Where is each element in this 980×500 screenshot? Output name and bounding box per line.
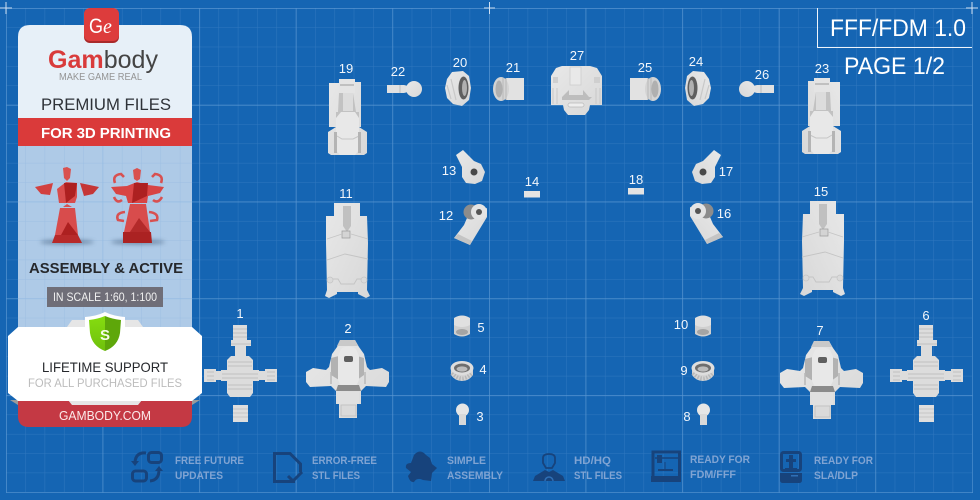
feature: error-free: ERROR-FREE <box>312 455 377 467</box>
scale tag <box>47 287 163 307</box>
part 17 <box>692 150 733 184</box>
tagline: MAKE GAME REAL <box>59 71 142 83</box>
part 3 <box>456 404 484 425</box>
panel top <box>18 25 192 118</box>
brand name: Gambody <box>48 46 158 74</box>
part 3: 3 <box>476 409 484 424</box>
feature: simple assembly: ASSEMBLY <box>447 470 504 482</box>
part 11: 11 <box>339 186 353 201</box>
part 8 <box>683 404 710 425</box>
support heading: LIFETIME SUPPORT <box>42 359 168 375</box>
part 21: 21 <box>506 60 520 75</box>
feature: simple assembly: SIMPLE <box>447 455 486 467</box>
part 10 <box>674 316 711 336</box>
feature: SLA: SLA/DLP <box>814 470 858 482</box>
part 24 <box>685 54 711 106</box>
feature: SLA <box>780 452 873 483</box>
part 7: 7 <box>816 323 824 338</box>
part 10: 10 <box>674 317 688 332</box>
red banner <box>18 118 192 146</box>
icon: update arrows <box>131 452 163 481</box>
part 22: 22 <box>391 64 405 79</box>
part 18: 18 <box>629 172 643 187</box>
part 23: 23 <box>815 61 829 76</box>
icon: green shield: S <box>100 327 110 344</box>
part 14 <box>524 174 540 198</box>
footer features <box>131 452 873 483</box>
panel: promo sidebar <box>8 8 202 427</box>
part 2 <box>306 321 389 418</box>
feature: free updates <box>131 452 244 482</box>
icon: SLA printer <box>780 452 802 483</box>
feature: HD/HQ <box>533 454 622 482</box>
red banner: FOR 3D PRINTING <box>41 125 171 142</box>
assembly heading: ASSEMBLY & ACTIVE <box>29 261 183 277</box>
part 19: 19 <box>339 61 353 76</box>
part 20 <box>445 55 471 106</box>
support ribbon <box>8 312 202 405</box>
part 22 <box>387 64 422 97</box>
part 5: 5 <box>477 320 485 335</box>
feature: SLA: READY FOR <box>814 455 873 467</box>
icon: green shield <box>85 312 125 353</box>
version heading <box>818 8 972 48</box>
part 12: 12 <box>439 208 453 223</box>
part 27 <box>551 48 602 115</box>
premium heading: PREMIUM FILES <box>41 95 171 114</box>
icon: FDM printer <box>651 452 681 482</box>
part 13 <box>442 150 485 184</box>
part 9: 9 <box>680 363 688 378</box>
icon: static figure <box>35 167 99 244</box>
part 1 <box>204 306 277 422</box>
feature: FDM: FDM/FFF <box>690 469 736 481</box>
version heading: FFF/FDM 1.0 <box>830 15 966 42</box>
feature: HD/HQ: STL FILES <box>574 470 622 482</box>
logo badge: G <box>89 15 103 38</box>
part 24: 24 <box>689 54 703 69</box>
part 11 <box>325 186 370 298</box>
part 20: 20 <box>453 55 467 70</box>
support subheading: FOR ALL PURCHASED FILES <box>28 376 182 390</box>
part 13: 13 <box>442 163 456 178</box>
panel footer <box>18 395 192 427</box>
part 6 <box>890 308 963 422</box>
part 12 <box>439 204 487 245</box>
part 25 <box>630 60 661 101</box>
scale tag: IN SCALE 1:60, 1:100 <box>53 290 157 304</box>
part 14: 14 <box>525 174 539 189</box>
part 25: 25 <box>638 60 652 75</box>
part 15: 15 <box>814 184 828 199</box>
part 9 <box>680 361 714 381</box>
part 4: 4 <box>479 362 487 377</box>
part 16: 16 <box>717 206 731 221</box>
panel lower <box>18 146 192 336</box>
icon: helmet bust <box>533 454 565 481</box>
part 26: 26 <box>755 67 769 82</box>
feature: error-free: STL FILES <box>312 470 360 482</box>
icon: articulated figure <box>111 168 165 244</box>
part 15 <box>800 184 845 296</box>
part 7 <box>780 323 863 419</box>
part 23 <box>802 61 841 154</box>
feature: FDM: READY FOR <box>690 454 750 466</box>
part 2: 2 <box>344 321 352 336</box>
feature: HD/HQ: HD/HQ <box>574 455 611 467</box>
part 19 <box>328 61 367 155</box>
icon: checked document <box>274 454 302 482</box>
part 6: 6 <box>922 308 930 323</box>
logo badge: e <box>103 16 112 38</box>
part 1: 1 <box>236 306 244 321</box>
feature: FDM <box>651 452 750 482</box>
icon: puzzle piece <box>406 452 437 482</box>
feature: free updates: FREE FUTURE <box>175 455 244 467</box>
website: GAMBODY.COM <box>59 408 151 423</box>
page number: PAGE 1/2 <box>844 53 945 80</box>
part 27: 27 <box>570 48 584 63</box>
feature: simple assembly <box>406 452 504 482</box>
part 8: 8 <box>683 409 691 424</box>
feature: error-free <box>274 454 377 482</box>
part 16 <box>690 203 731 244</box>
part 26 <box>739 67 774 97</box>
part 17: 17 <box>719 164 733 179</box>
feature: free updates: UPDATES <box>175 470 223 482</box>
logo badge <box>84 8 119 43</box>
part 21 <box>493 60 524 101</box>
part 18 <box>628 172 644 194</box>
part 4 <box>450 361 487 381</box>
part 5 <box>454 316 485 336</box>
